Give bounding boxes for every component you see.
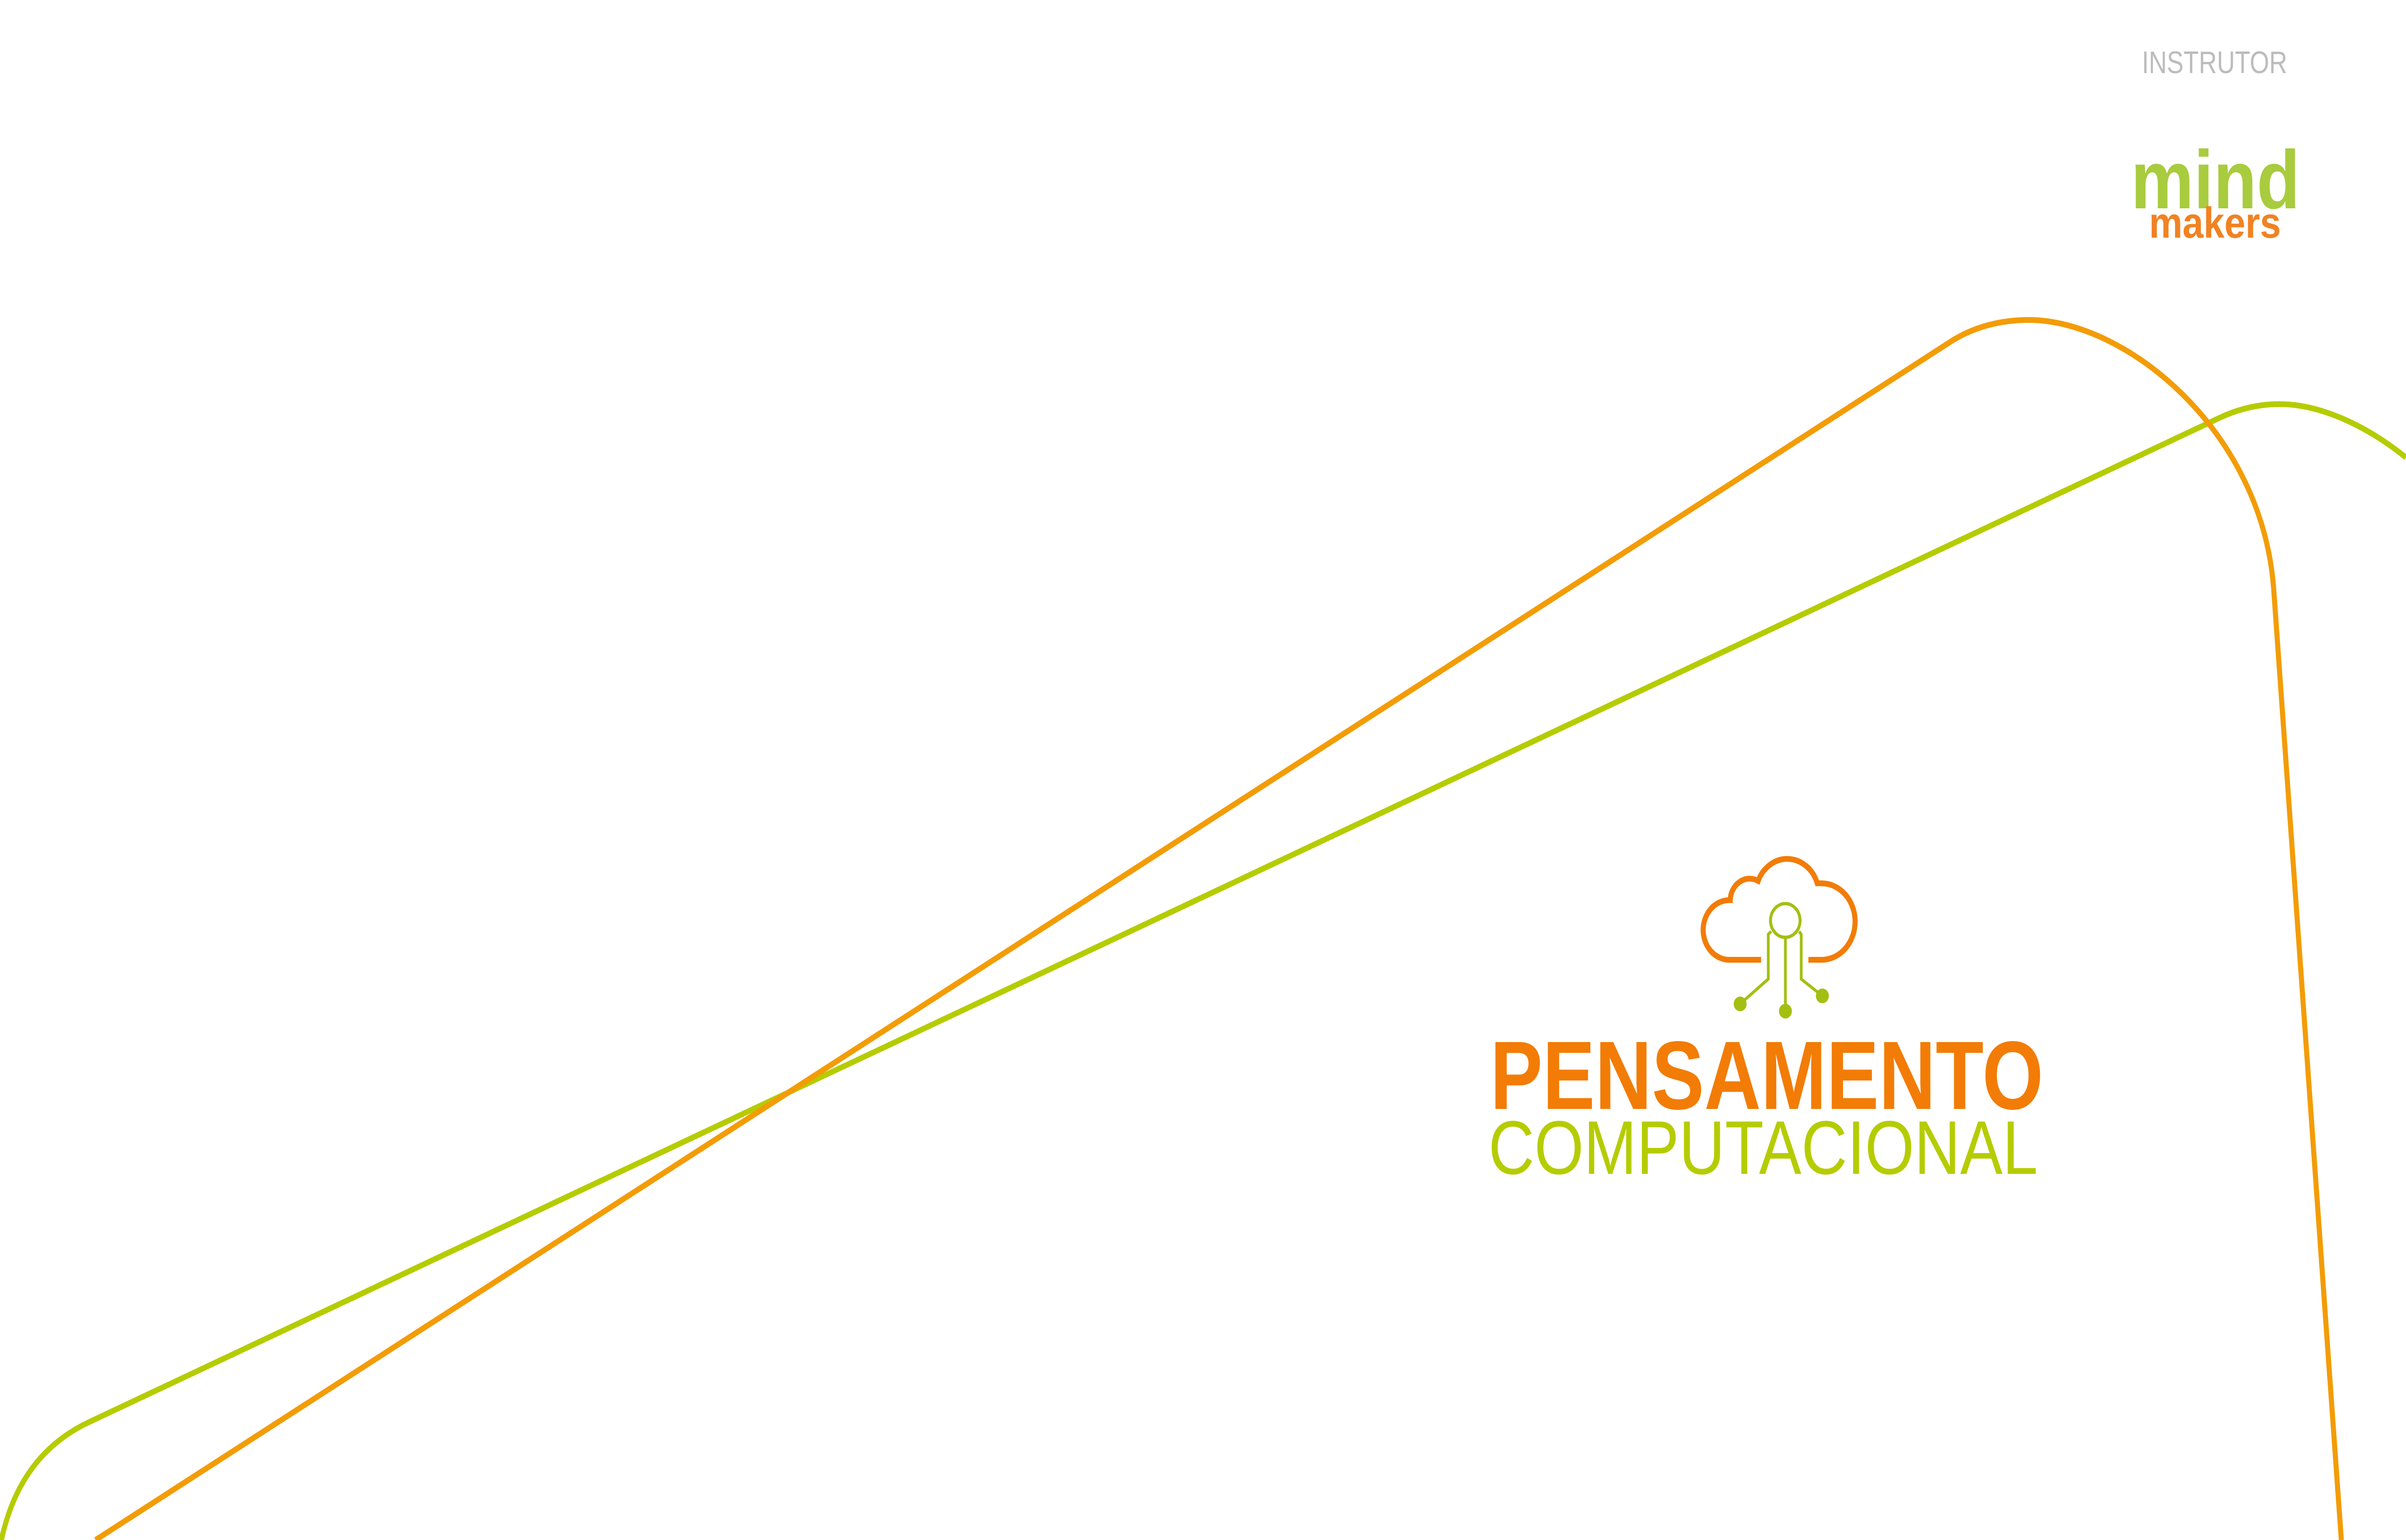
- title: pensamento: PENSAMENTO: [1490, 1021, 2043, 1130]
- orange curved line: [95, 320, 2342, 1540]
- logo word: mind: mind: [2131, 134, 2300, 226]
- subtitle: computacional: COMPUTACIONAL: [1488, 1105, 2038, 1190]
- green curved line: [0, 404, 2406, 1540]
- logo: mind makers: [2131, 134, 2300, 247]
- instructor label: INSTRUTOR: [2142, 45, 2287, 80]
- logo word: makers: makers: [2149, 198, 2281, 247]
- circuit head: [1770, 904, 1800, 937]
- circuit traces: [1740, 931, 1822, 1011]
- icon: cloud with circuit: [1703, 859, 1855, 1018]
- circuit nodes: [1734, 989, 1829, 1018]
- cloud outline: [1703, 859, 1855, 960]
